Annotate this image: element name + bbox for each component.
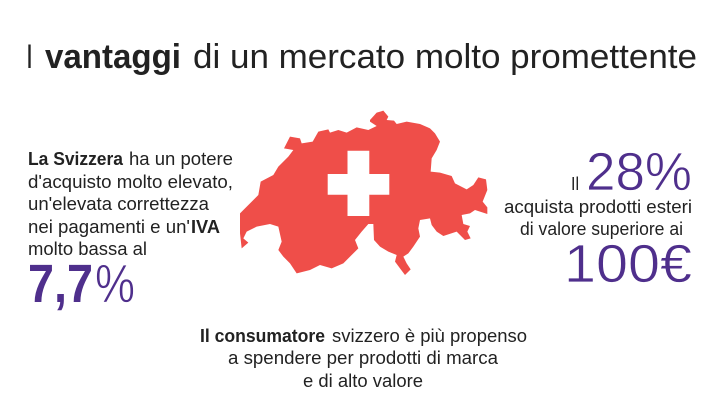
text block: right foreign products (504, 196, 692, 239)
text block: left purchasing power: La Svizzera (28, 148, 124, 169)
title: I (26, 38, 33, 76)
title: di un mercato molto promettente (193, 38, 697, 76)
icon: white cross (328, 151, 389, 216)
text block: left purchasing power: IVA (191, 216, 220, 237)
statistic: 28%: Il (571, 173, 579, 194)
title: vantaggi (45, 38, 181, 76)
statistic: 7,7%: % (95, 254, 135, 314)
text block: left purchasing power: d'acquisto molto elevato, (28, 171, 233, 192)
text block: left purchasing power: molto bassa al (28, 238, 147, 259)
text block: left purchasing power (28, 148, 233, 259)
statistic: 100€: 100€ (564, 234, 692, 294)
map outline (240, 111, 487, 275)
text block: right foreign products: acquista prodotti esteri (504, 196, 692, 217)
text block: bottom consumer: svizzero è più propenso (332, 325, 527, 346)
text block: bottom consumer (200, 325, 527, 391)
statistic: 7,7%: 7,7 (28, 254, 93, 314)
text block: left purchasing power: un'elevata correttezza (28, 193, 210, 214)
statistic: 28%: 28% (586, 142, 692, 202)
map: Switzerland with white cross (240, 111, 487, 275)
text block: bottom consumer: Il consumatore (200, 325, 325, 346)
text block: right foreign products: di valore superiore ai (520, 218, 683, 239)
text block: bottom consumer: e di alto valore (303, 370, 423, 391)
text block: left purchasing power: nei pagamenti e un' (28, 216, 190, 237)
text block: left purchasing power: ha un potere (129, 148, 233, 169)
text block: bottom consumer: a spendere per prodotti di marca (228, 347, 499, 368)
